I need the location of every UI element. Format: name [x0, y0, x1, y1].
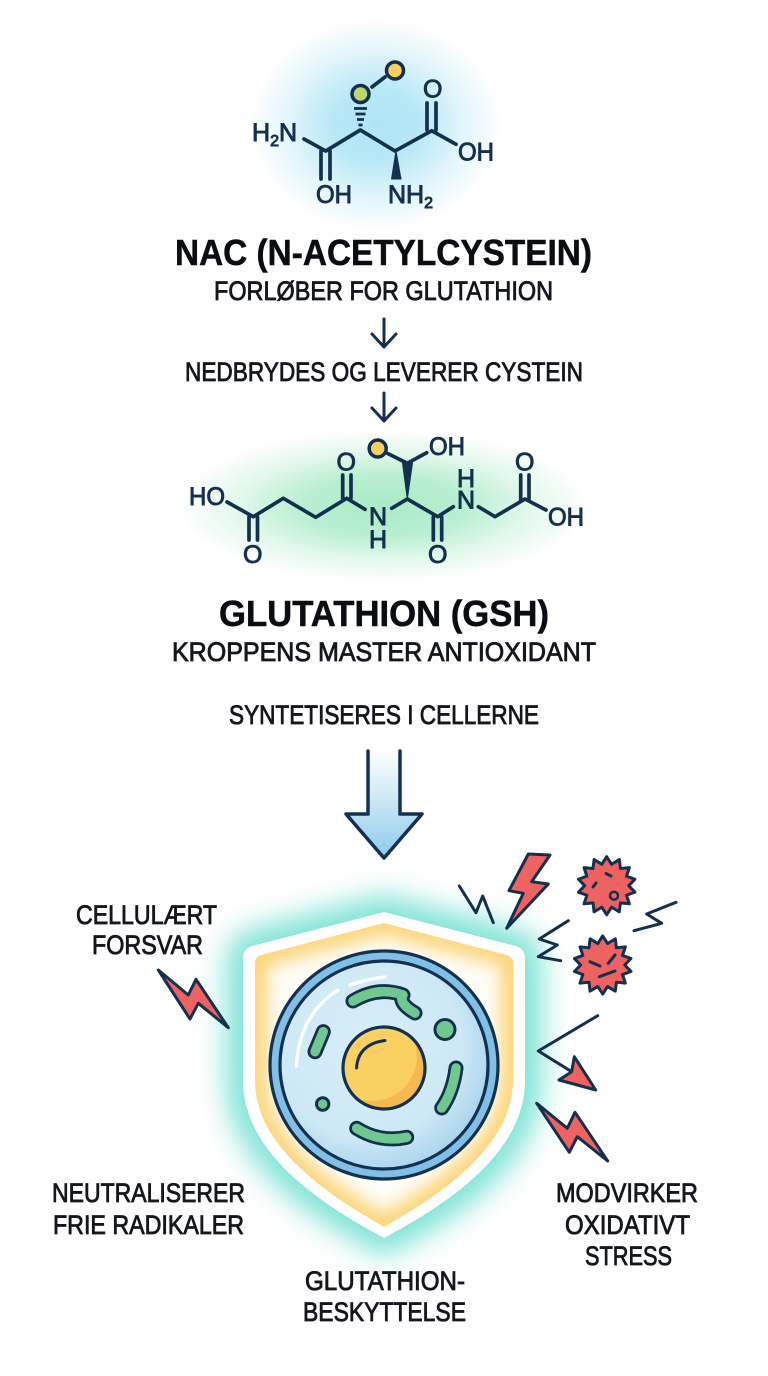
sulfur atom [352, 86, 369, 102]
free radical 2 [568, 931, 637, 999]
organelle: vesicle [435, 1020, 455, 1040]
teal glow [237, 906, 531, 1244]
sulfur atom [369, 440, 386, 457]
bolt left [158, 970, 228, 1028]
blue glow [251, 20, 501, 230]
label: glutathione protection: BESKYTTELSE [303, 1297, 466, 1327]
threats [158, 852, 676, 1161]
GSH bonds [227, 453, 546, 540]
hashed bond [354, 108, 367, 125]
NAC molecule [251, 20, 501, 230]
cell membrane [270, 951, 498, 1179]
label: counters oxidative stress [556, 1178, 698, 1271]
radical 1 details [593, 874, 618, 900]
step text: NEDBRYDES OG LEVERER CYSTEIN [185, 357, 583, 387]
O label center: O [428, 541, 447, 569]
title: NAC: NAC (N-ACETYLCYSTEIN) [175, 232, 592, 273]
label: glutathione protection: GLUTATHION- [305, 1266, 465, 1296]
organelle: small vesicle [316, 1098, 329, 1110]
shield with cell [237, 906, 531, 1244]
oxygen atom [386, 62, 404, 79]
NH2 label: 2 [424, 195, 433, 212]
label: counters oxidative stress: STRESS [585, 1241, 672, 1271]
H label right: H [457, 465, 475, 493]
label: cellular defense [76, 900, 217, 960]
label: counters oxidative stress: MODVIRKER [556, 1178, 698, 1208]
arrow 1 [372, 319, 396, 347]
NH2 label: NH [388, 181, 424, 209]
cell interior [280, 961, 488, 1169]
OH label top: OH [429, 433, 465, 461]
H2N label: 2 [270, 133, 279, 150]
zigzag middle [538, 921, 568, 961]
arrow attack head [559, 1057, 596, 1090]
green glow [179, 431, 589, 581]
label: neutralizes free radicals: FRIE RADIKALER [53, 1210, 244, 1240]
NAC bonds [304, 77, 456, 179]
N label: N [369, 503, 387, 531]
organelle: golgi [353, 992, 415, 1013]
wedge bond [402, 463, 412, 499]
free radical 1 [572, 852, 641, 920]
zigzag right [634, 902, 676, 931]
subtitle: precursor: FORLØBER FOR GLUTATHION [214, 276, 553, 306]
O label: O [423, 76, 442, 104]
wedge bond [392, 151, 401, 179]
H2N label: H [252, 119, 270, 147]
N label right: N [457, 486, 475, 514]
H2N label: N [279, 119, 297, 147]
zigzag left [459, 886, 493, 923]
subtitle: master antioxidant: KROPPENS MASTER ANTIOXIDANT [172, 637, 596, 667]
bolt top [507, 854, 550, 928]
label: neutralizes free radicals: NEUTRALISERER [52, 1178, 245, 1208]
arrow fill [346, 750, 422, 858]
organelle: bottom mitochondrion [357, 1128, 407, 1139]
shield inner yellow [250, 918, 520, 1233]
label: neutralizes free radicals [52, 1178, 245, 1240]
arrow outline [346, 751, 422, 858]
highlights [296, 977, 385, 1066]
OH label bottom: OH [316, 181, 352, 209]
arrow attack line [538, 1016, 598, 1072]
H label: H [369, 526, 387, 554]
GSH molecule [179, 431, 589, 581]
O label right: O [515, 448, 534, 476]
label: cellular defense: CELLULÆRT [76, 900, 217, 930]
step text: synthesis: SYNTETISERES I CELLERNE [229, 700, 539, 730]
O label left: O [243, 541, 262, 569]
nucleus [341, 1025, 427, 1111]
organelle: left mitochondrion [315, 1032, 323, 1052]
arrow 2 [372, 393, 396, 421]
O label upper: O [336, 448, 356, 476]
OH label right: OH [458, 138, 494, 166]
radical 2 face [590, 955, 615, 977]
OH label right: OH [548, 504, 584, 532]
label: glutathione protection [303, 1266, 466, 1327]
label: cellular defense: FORSVAR [92, 930, 203, 960]
bolt lower right [537, 1103, 608, 1161]
large down arrow [346, 750, 422, 858]
organelle: right mitochondrion [442, 1068, 456, 1108]
shield outer white edge [243, 912, 525, 1238]
title: GSH: GLUTATHION (GSH) [219, 593, 549, 634]
HO label: HO [189, 483, 225, 511]
label: counters oxidative stress: OXIDATIVT [565, 1210, 690, 1240]
